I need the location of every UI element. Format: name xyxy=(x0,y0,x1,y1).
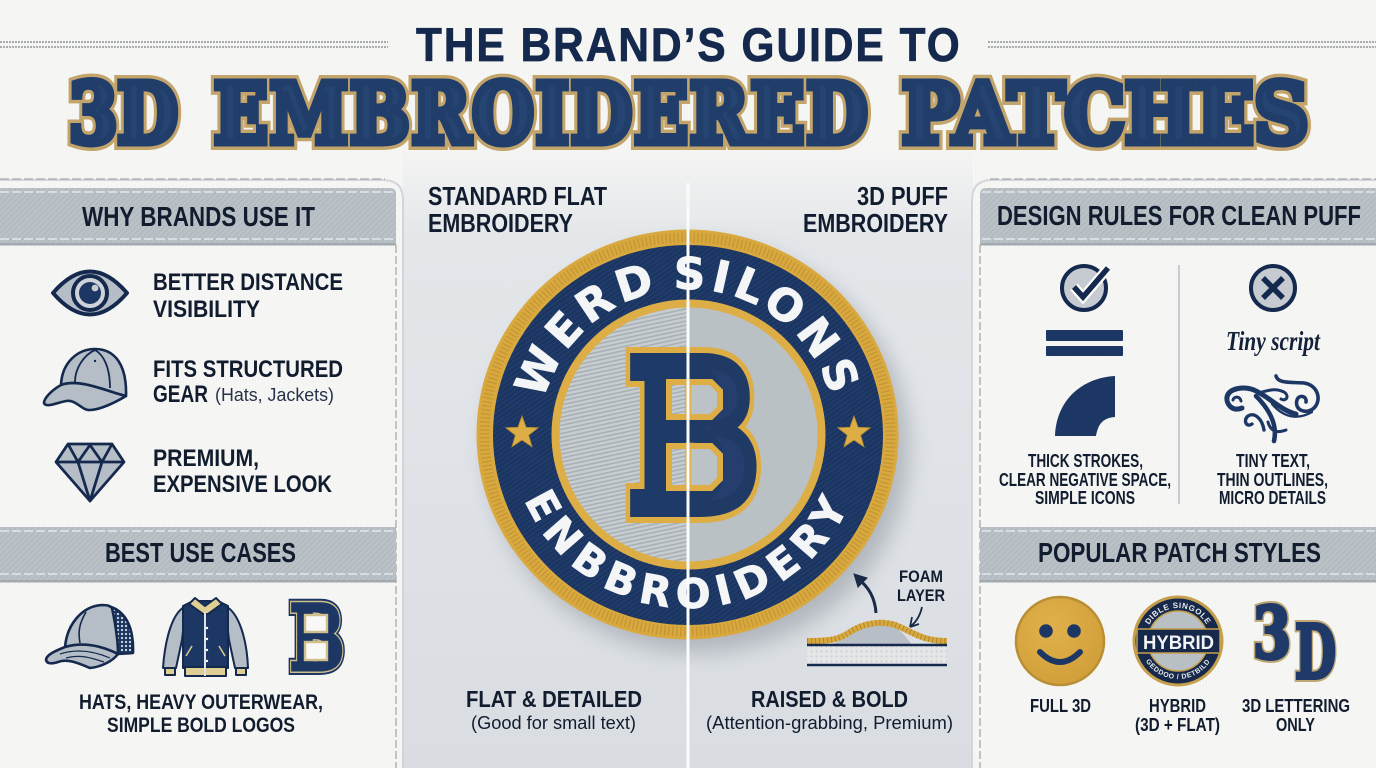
heading: 3D embroidered patches: 3D xyxy=(69,66,178,162)
lower counter of b, flat side xyxy=(669,446,688,488)
text: fits structured gear: FITS STRUCTURED xyxy=(153,356,343,383)
title block xyxy=(0,20,1376,163)
caption: flat and detailed: (Good for small text) xyxy=(471,713,636,733)
text: better distance visibility: VISIBILITY xyxy=(153,296,260,323)
heading band: why brands use it: WHY BRANDS USE IT xyxy=(82,201,315,232)
text: tiny text thin outlines micro details: TINY TEXT, xyxy=(1236,451,1310,471)
text: full 3d: FULL 3D xyxy=(1030,696,1091,716)
icon: right gold star xyxy=(838,416,870,447)
panel: why brands use it and best use cases xyxy=(0,179,403,768)
text: hybrid 3d plus flat: HYBRID xyxy=(1149,696,1206,716)
center comparison panel background xyxy=(403,150,973,768)
heading: standard flat embroidery: EMBROIDERY xyxy=(428,208,573,238)
patch shadow xyxy=(487,243,909,653)
icon: hybrid patch xyxy=(1132,596,1224,686)
icon: negative space shape xyxy=(1055,376,1115,436)
upper counter of b, puff side xyxy=(688,382,720,417)
navy twill ring xyxy=(493,245,883,625)
icon: check mark circle xyxy=(1062,266,1108,310)
heading band: why brands use it xyxy=(0,188,396,246)
icon: left gold star xyxy=(506,416,538,447)
arc text: werd silons: WERD SILONS xyxy=(512,256,858,392)
text: fits structured gear xyxy=(153,356,343,408)
heading band: popular patch styles xyxy=(980,527,1376,582)
text: thick strokes clear negative space simple icons: THICK STROKES, xyxy=(1028,451,1143,471)
icon: hybrid patch: GEDDOO / DETBILD xyxy=(1146,659,1209,680)
upper counter of b, flat side xyxy=(669,382,688,417)
heading: 3D embroidered patches: PATCHES xyxy=(902,65,1309,162)
heading: 3D embroidered patches: EMBROIDERED xyxy=(214,66,868,163)
gold merrowed border xyxy=(476,230,898,640)
heading: 3D embroidered patches: PATCHES xyxy=(902,65,1309,162)
text: hats heavy outerwear simple bold logos: SIMPLE BOLD LOGOS xyxy=(107,714,295,737)
heading band: best use cases xyxy=(0,527,396,582)
heading band: design rules for clean puff xyxy=(980,188,1376,246)
text: 3d lettering only: 3D LETTERING xyxy=(1242,696,1350,716)
foam dome xyxy=(830,623,912,645)
caption: raised and bold: (Attention-grabbing, Premium) xyxy=(706,713,953,733)
center varsity letter b: B xyxy=(629,318,759,557)
lower counter of b, puff side xyxy=(688,446,720,488)
text: premium expensive look: EXPENSIVE LOOK xyxy=(153,471,333,498)
text: thick strokes clear negative space simple icons xyxy=(999,451,1171,508)
heading: 3D embroidered patches xyxy=(69,65,1309,163)
text: fits structured gear: GEAR xyxy=(153,381,208,408)
icon: varsity letter b: B xyxy=(290,586,344,690)
decorative stitched lines right of heading xyxy=(988,42,1376,47)
icon: full 3d smiley patch xyxy=(1016,597,1104,685)
icon: varsity letter b: B xyxy=(290,586,344,690)
text: tiny text thin outlines micro details: THIN OUTLINES, xyxy=(1217,470,1328,490)
arrow: up to patch xyxy=(854,574,876,613)
text: hybrid 3d plus flat xyxy=(1135,696,1220,735)
text: better distance visibility xyxy=(153,269,343,323)
heading: the brand's guide to: THE BRAND’S GUIDE TO xyxy=(416,20,960,72)
heading: standard flat embroidery: STANDARD FLAT xyxy=(428,181,607,211)
inner gold ring and gray field xyxy=(552,300,826,570)
label: foam layer: LAYER xyxy=(897,586,945,605)
center varsity letter b xyxy=(626,347,762,523)
center varsity letter b: B xyxy=(629,318,759,557)
text: tiny text thin outlines micro details: MICRO DETAILS xyxy=(1219,488,1326,508)
text: 3d lettering only xyxy=(1242,696,1350,735)
icon: 3d letters patch: D xyxy=(1295,610,1336,696)
text: premium expensive look: PREMIUM, xyxy=(153,445,259,472)
icon: hybrid patch: DIBLE SINGOLE xyxy=(1144,602,1211,624)
icon: x mark circle xyxy=(1251,266,1295,310)
heading: 3D embroidered patches: 3D xyxy=(69,66,178,162)
text: fits structured gear: (Hats, Jackets) xyxy=(215,385,334,405)
caption: raised and bold xyxy=(706,686,953,733)
central patch comparison xyxy=(476,230,898,640)
text: hats heavy outerwear simple bold logos xyxy=(79,691,323,737)
label: foam layer xyxy=(897,567,945,605)
icon: 3d letters patch: 3 xyxy=(1253,591,1291,675)
caption: flat and detailed xyxy=(466,686,642,733)
icon: diamond xyxy=(56,444,124,501)
fabric base xyxy=(807,646,947,665)
text: thick strokes clear negative space simple icons: CLEAR NEGATIVE SPACE, xyxy=(999,470,1171,490)
text: premium expensive look xyxy=(153,445,333,498)
heading: 3d puff embroidery xyxy=(803,181,948,238)
icon: varsity letter b: B xyxy=(290,586,344,690)
text: tiny script sample: Tiny script xyxy=(1226,326,1321,356)
center varsity letter b: B xyxy=(629,318,759,557)
text: tiny text thin outlines micro details xyxy=(1217,451,1328,508)
icon: 3d letters patch: 3 xyxy=(1253,591,1291,675)
icon: mesh trucker cap xyxy=(46,605,133,668)
icon: eye xyxy=(53,272,127,314)
text: hybrid 3d plus flat: (3D + FLAT) xyxy=(1135,715,1220,735)
icon: thick stroke bars xyxy=(1046,330,1123,356)
heading: 3D embroidered patches: EMBROIDERED xyxy=(214,66,868,163)
text: thick strokes clear negative space simple icons: SIMPLE ICONS xyxy=(1035,488,1135,508)
heading: 3d puff embroidery: EMBROIDERY xyxy=(803,208,948,238)
arc text: enbbroidery: ENBBROIDERY xyxy=(525,488,844,609)
icon: varsity jacket xyxy=(163,598,248,676)
diagram: foam layer cross section xyxy=(807,567,947,665)
heading band: best use cases: BEST USE CASES xyxy=(105,537,296,568)
text: hats heavy outerwear simple bold logos: HATS, HEAVY OUTERWEAR, xyxy=(79,691,323,714)
caption: flat and detailed: FLAT & DETAILED xyxy=(466,686,642,712)
gold thread layer xyxy=(807,623,947,641)
arrow: to foam xyxy=(910,607,922,627)
label: foam layer: FOAM xyxy=(899,567,943,586)
icon: ornate flourish xyxy=(1227,376,1318,441)
heading: standard flat embroidery xyxy=(428,181,607,238)
text: 3d lettering only: ONLY xyxy=(1276,715,1315,735)
icon: 3d letters patch: D xyxy=(1295,610,1336,696)
panel: design rules and popular patch styles xyxy=(971,178,1376,768)
icon: baseball cap xyxy=(44,349,126,410)
text: better distance visibility: BETTER DISTANCE xyxy=(153,269,343,296)
icon: 3d letters patch xyxy=(1253,591,1336,696)
icon: hybrid patch: HYBRID xyxy=(1143,633,1214,654)
heading: 3d puff embroidery: 3D PUFF xyxy=(857,181,948,211)
caption: raised and bold: RAISED & BOLD xyxy=(751,686,908,712)
center divider line xyxy=(686,183,690,768)
decorative stitched lines left of heading xyxy=(0,42,388,47)
